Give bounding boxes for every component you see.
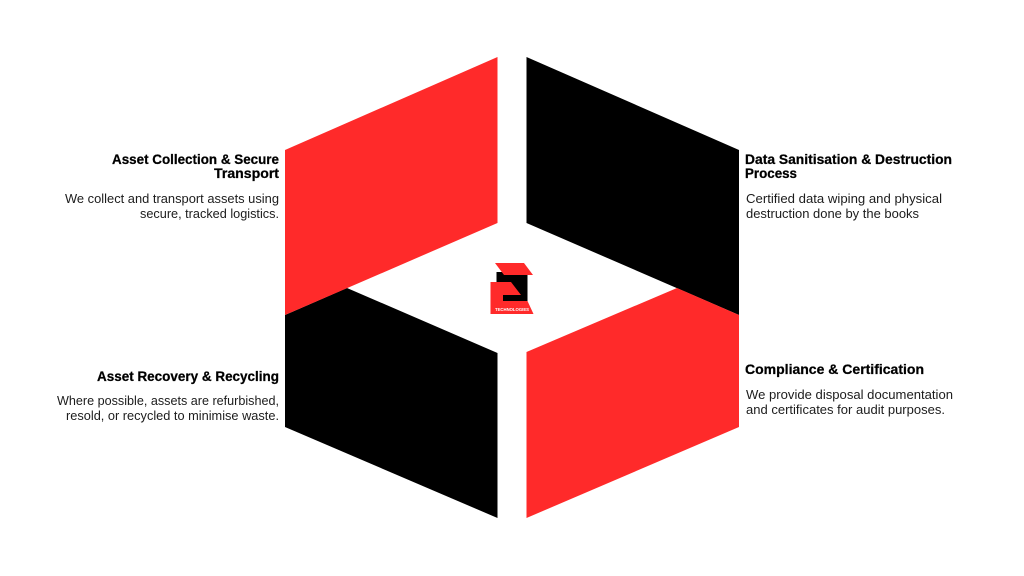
body: compliance: We provide disposal documentation <box>746 388 953 402</box>
body: asset recovery: Where possible, assets are refurbished, <box>57 394 279 408</box>
text block: data sanitisation <box>745 152 952 221</box>
heading: asset collection <box>112 152 280 181</box>
body: asset recovery: resold, or recycled to minimise waste. <box>66 409 279 423</box>
body: asset collection <box>65 192 279 221</box>
body: data sanitisation: Certified data wiping and physical <box>746 192 942 206</box>
heading: asset recovery: Asset Recovery & Recycling <box>97 369 279 384</box>
icon: company logo <box>490 263 534 314</box>
body: compliance <box>746 388 953 417</box>
body: data sanitisation <box>746 192 942 221</box>
heading: asset collection: Transport <box>214 166 280 181</box>
panel: red upper-left segment <box>285 57 498 315</box>
body: asset collection: secure, tracked logistics. <box>140 207 279 221</box>
panel: black lower-left segment <box>285 288 498 518</box>
body: asset collection: We collect and transport assets using <box>65 192 279 206</box>
panel: black upper-right segment <box>526 57 739 315</box>
heading: data sanitisation: Data Sanitisation & Destruction <box>745 152 952 167</box>
icon: company logo: TECHNOLOGIES <box>495 307 529 312</box>
heading: data sanitisation <box>745 152 952 181</box>
body: data sanitisation: destruction done by the books <box>746 207 919 221</box>
heading: data sanitisation: Process <box>745 166 797 181</box>
text block: asset recovery <box>57 369 279 423</box>
heading: compliance: Compliance & Certification <box>745 362 924 377</box>
body: asset recovery <box>57 394 279 423</box>
panel: red lower-right segment <box>526 288 739 518</box>
body: compliance: and certificates for audit purposes. <box>746 403 945 417</box>
heading: asset collection: Asset Collection & Secure <box>112 152 279 167</box>
text block: compliance <box>745 362 953 417</box>
text block: asset collection <box>65 152 280 221</box>
